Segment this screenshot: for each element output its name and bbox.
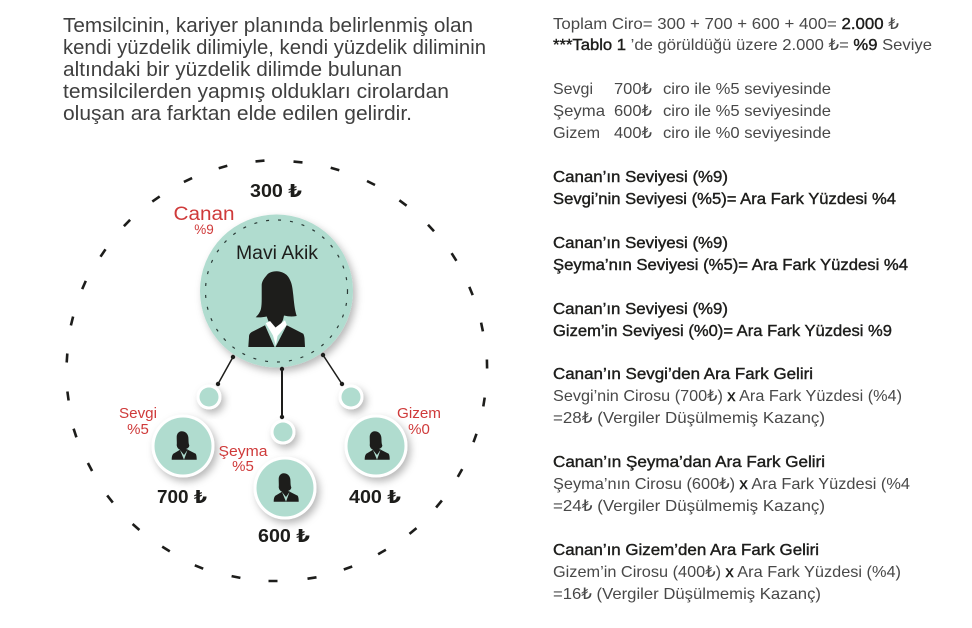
node: Sevgi [152, 414, 214, 478]
total revenue block: ***Tablo 1 ’de görüldüğü üzere 2.000 ₺= %9 Seviye [553, 37, 932, 54]
red label: Canan: %9 [194, 222, 214, 237]
levels list: 600₺ [614, 103, 652, 120]
difference: Gizem: Canan’ın Seviyesi (%9) [553, 301, 728, 318]
small node centre [270, 367, 296, 444]
income from Sevgi [553, 366, 902, 427]
red label: Canan [174, 204, 234, 237]
intro paragraph: Temsilcinin, kariyer planında belirlenmiş olan [63, 15, 473, 37]
red label: Şeyma: Şeyma [218, 443, 268, 460]
connector end dots [231, 353, 325, 359]
total revenue block: Toplam Ciro= 300 + 700 + 600 + 400= 2.000 ₺ [553, 16, 899, 33]
main circle: Mavi Akik: Mavi Akik [236, 243, 319, 264]
node: Gizem [344, 414, 408, 478]
amount: 700: 700 ₺ [157, 487, 207, 507]
red label: Şeyma: %5 [232, 458, 254, 475]
income from Gizem: =16₺ (Vergiler Düşülmemiş Kazanç) [553, 586, 821, 603]
difference: Gizem [553, 301, 892, 340]
small node right [338, 382, 364, 410]
amount: 400: 400 ₺ [349, 487, 402, 507]
difference: Şeyma: Canan’ın Seviyesi (%9) [553, 235, 728, 252]
income from Şeyma: Canan’ın Şeyma’dan Ara Fark Geliri [553, 454, 825, 471]
income from Gizem: Canan’ın Gizem’den Ara Fark Geliri [553, 542, 819, 559]
red label: Şeyma [218, 443, 268, 475]
income from Gizem [553, 542, 901, 603]
difference: Şeyma: Şeyma’nın Seviyesi (%5)= Ara Fark Yüzdesi %4 [553, 257, 908, 274]
income from Sevgi: Canan’ın Sevgi’den Ara Fark Geliri [553, 366, 813, 383]
red label: Sevgi: %5 [127, 421, 149, 438]
amount: 300: 300 ₺ [250, 181, 303, 201]
levels list: 400₺ [614, 125, 652, 142]
income from Şeyma: =24₺ (Vergiler Düşülmemiş Kazanç) [553, 498, 825, 515]
income from Sevgi: Sevgi’nin Cirosu (700₺) x Ara Fark Yüzdesi (%4) [553, 388, 902, 405]
income from Sevgi: =28₺ (Vergiler Düşülmemiş Kazanç) [553, 410, 825, 427]
connector lines [218, 355, 342, 417]
intro paragraph: oluşan ara farktan elde edilen gelirdir. [63, 103, 412, 125]
icon: main person [248, 271, 305, 347]
red label: Gizem: Gizem [397, 405, 441, 422]
difference: Şeyma [553, 235, 908, 274]
red label: Canan: Canan [174, 204, 234, 225]
main circle: Mavi Akik [200, 214, 353, 368]
red label: Gizem [397, 405, 441, 438]
intro paragraph [63, 15, 486, 125]
intro paragraph: kendi yüzdelik dilimiyle, kendi yüzdelik diliminin [63, 37, 486, 59]
intro paragraph: altındaki bir yüzdelik dilimde bulunan [63, 59, 402, 81]
red label: Sevgi [119, 405, 157, 438]
intro paragraph: temsilcilerden yapmış oldukları cirolardan [63, 81, 449, 103]
levels list: Sevgi [553, 81, 593, 98]
difference: Gizem: Gizem’in Seviyesi (%0)= Ara Fark Yüzdesi %9 [553, 323, 892, 340]
difference: Sevgi: Sevgi’nin Seviyesi (%5)= Ara Fark Yüzdesi %4 [553, 191, 896, 208]
levels list [553, 81, 831, 142]
income from Şeyma: Şeyma’nın Cirosu (600₺) x Ara Fark Yüzdesi (%4 [553, 476, 910, 493]
node: Şeyma [254, 456, 316, 520]
income from Gizem: Gizem’in Cirosu (400₺) x Ara Fark Yüzdesi (%4) [553, 564, 901, 581]
income from Şeyma [553, 454, 910, 515]
levels list: 700₺ [614, 81, 652, 98]
diagram: sales network [67, 161, 487, 581]
outer dashed circle [67, 161, 487, 581]
levels list: Şeyma [553, 103, 605, 120]
levels list: ciro ile %5 seviyesinde [663, 103, 831, 120]
small node left [196, 382, 222, 410]
difference: Sevgi [553, 169, 896, 208]
total revenue block [553, 16, 932, 54]
red label: Gizem: %0 [408, 421, 430, 438]
levels list: ciro ile %0 seviyesinde [663, 125, 831, 142]
amount: 600: 600 ₺ [258, 526, 311, 546]
levels list: Gizem [553, 125, 600, 142]
red label: Sevgi: Sevgi [119, 405, 157, 422]
difference: Sevgi: Canan’ın Seviyesi (%9) [553, 169, 728, 186]
levels list: ciro ile %5 seviyesinde [663, 81, 831, 98]
